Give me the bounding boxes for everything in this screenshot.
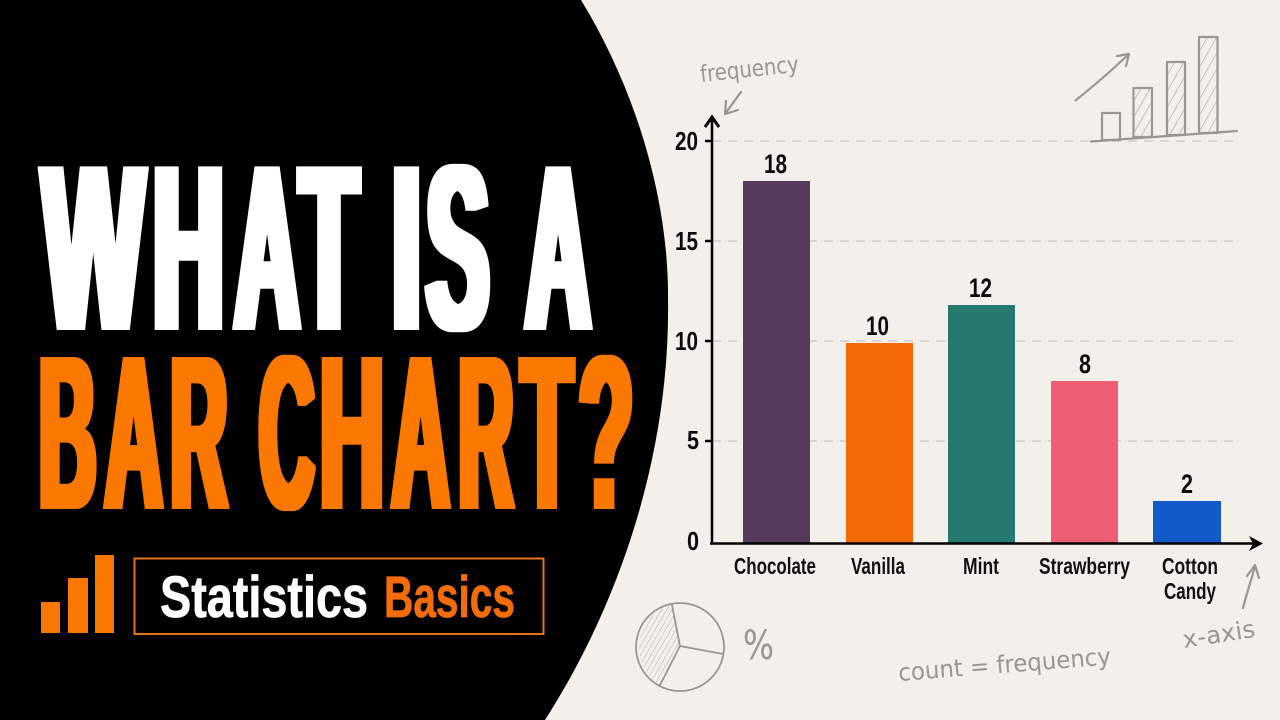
- icon: sketched rising bars: [1076, 37, 1237, 142]
- icon: orange bars: [41, 555, 114, 633]
- y axis labels: 15: [675, 226, 698, 256]
- annotation: percent sign: %: [743, 623, 774, 669]
- title line: WHAT IS A: T: [300, 116, 358, 379]
- title line: BAR CHART?: C: [259, 312, 314, 555]
- annotation: x-axis: x-axis: [1181, 615, 1257, 654]
- annotation: frequency: frequency: [699, 52, 800, 88]
- title line: WHAT IS A: S: [426, 116, 489, 379]
- badge: Statistics Basics: [134, 558, 544, 634]
- bar: Strawberry: [1051, 349, 1118, 543]
- bar: Cotton Candy: 2: [1181, 469, 1193, 499]
- y axis labels: 20: [675, 126, 698, 156]
- title line: WHAT IS A: W: [43, 116, 144, 379]
- y axis labels: 0: [687, 526, 699, 556]
- bar: Strawberry: 8: [1079, 349, 1091, 379]
- annotation: count = frequency: count = frequency: [897, 642, 1112, 687]
- x axis labels: Cotton: [1162, 553, 1218, 579]
- bar: Vanilla: 10: [866, 311, 889, 341]
- x axis: [710, 536, 1263, 551]
- annotation: x-axis: [1181, 565, 1259, 654]
- annotation: frequency: [699, 52, 800, 114]
- title line: BAR CHART?: H: [320, 312, 384, 555]
- title line: WHAT IS A: I: [392, 116, 421, 379]
- arrow: frequency to y axis: [725, 92, 741, 114]
- arrow: x-axis label to axis: [1243, 565, 1259, 608]
- title line: BAR CHART?: T: [521, 312, 573, 555]
- x axis labels: Chocolate: [734, 553, 816, 579]
- y axis: [705, 117, 719, 544]
- bar: Vanilla: [846, 311, 913, 543]
- title line: WHAT IS A: A: [235, 116, 299, 379]
- bar: Chocolate: 18: [764, 149, 787, 179]
- title line: BAR CHART?: B: [39, 312, 96, 555]
- x axis labels: Strawberry: [1039, 553, 1130, 579]
- bar: Cotton Candy: [1153, 469, 1221, 543]
- title line: BAR CHART?: R: [170, 312, 227, 555]
- bar: Mint: 12: [969, 273, 992, 303]
- y axis labels: 5: [687, 425, 699, 455]
- black curved panel: [0, 0, 668, 720]
- x axis labels: Vanilla: [851, 553, 905, 579]
- grid lines: [712, 141, 1236, 441]
- x axis labels: [734, 553, 1218, 604]
- title line: BAR CHART?: A: [105, 312, 162, 555]
- title: [39, 116, 634, 555]
- y axis labels: [675, 126, 699, 556]
- badge: Statistics Basics: Basics: [384, 565, 515, 630]
- icon: sketched pie chart: [636, 603, 724, 691]
- bar: Chocolate: [743, 149, 810, 543]
- badge: Statistics Basics: Statistics: [160, 565, 368, 630]
- x axis labels: Mint: [963, 553, 999, 579]
- x axis labels: Candy: [1164, 578, 1216, 604]
- title line: BAR CHART?: A: [392, 312, 449, 555]
- bar: Mint: [948, 273, 1015, 543]
- bar chart: [675, 117, 1263, 604]
- text: ?: [578, 312, 634, 555]
- title line: WHAT IS A: H: [153, 116, 224, 379]
- y axis labels: 10: [675, 326, 698, 356]
- title: A: [526, 116, 590, 379]
- title line: BAR CHART?: R: [459, 312, 513, 555]
